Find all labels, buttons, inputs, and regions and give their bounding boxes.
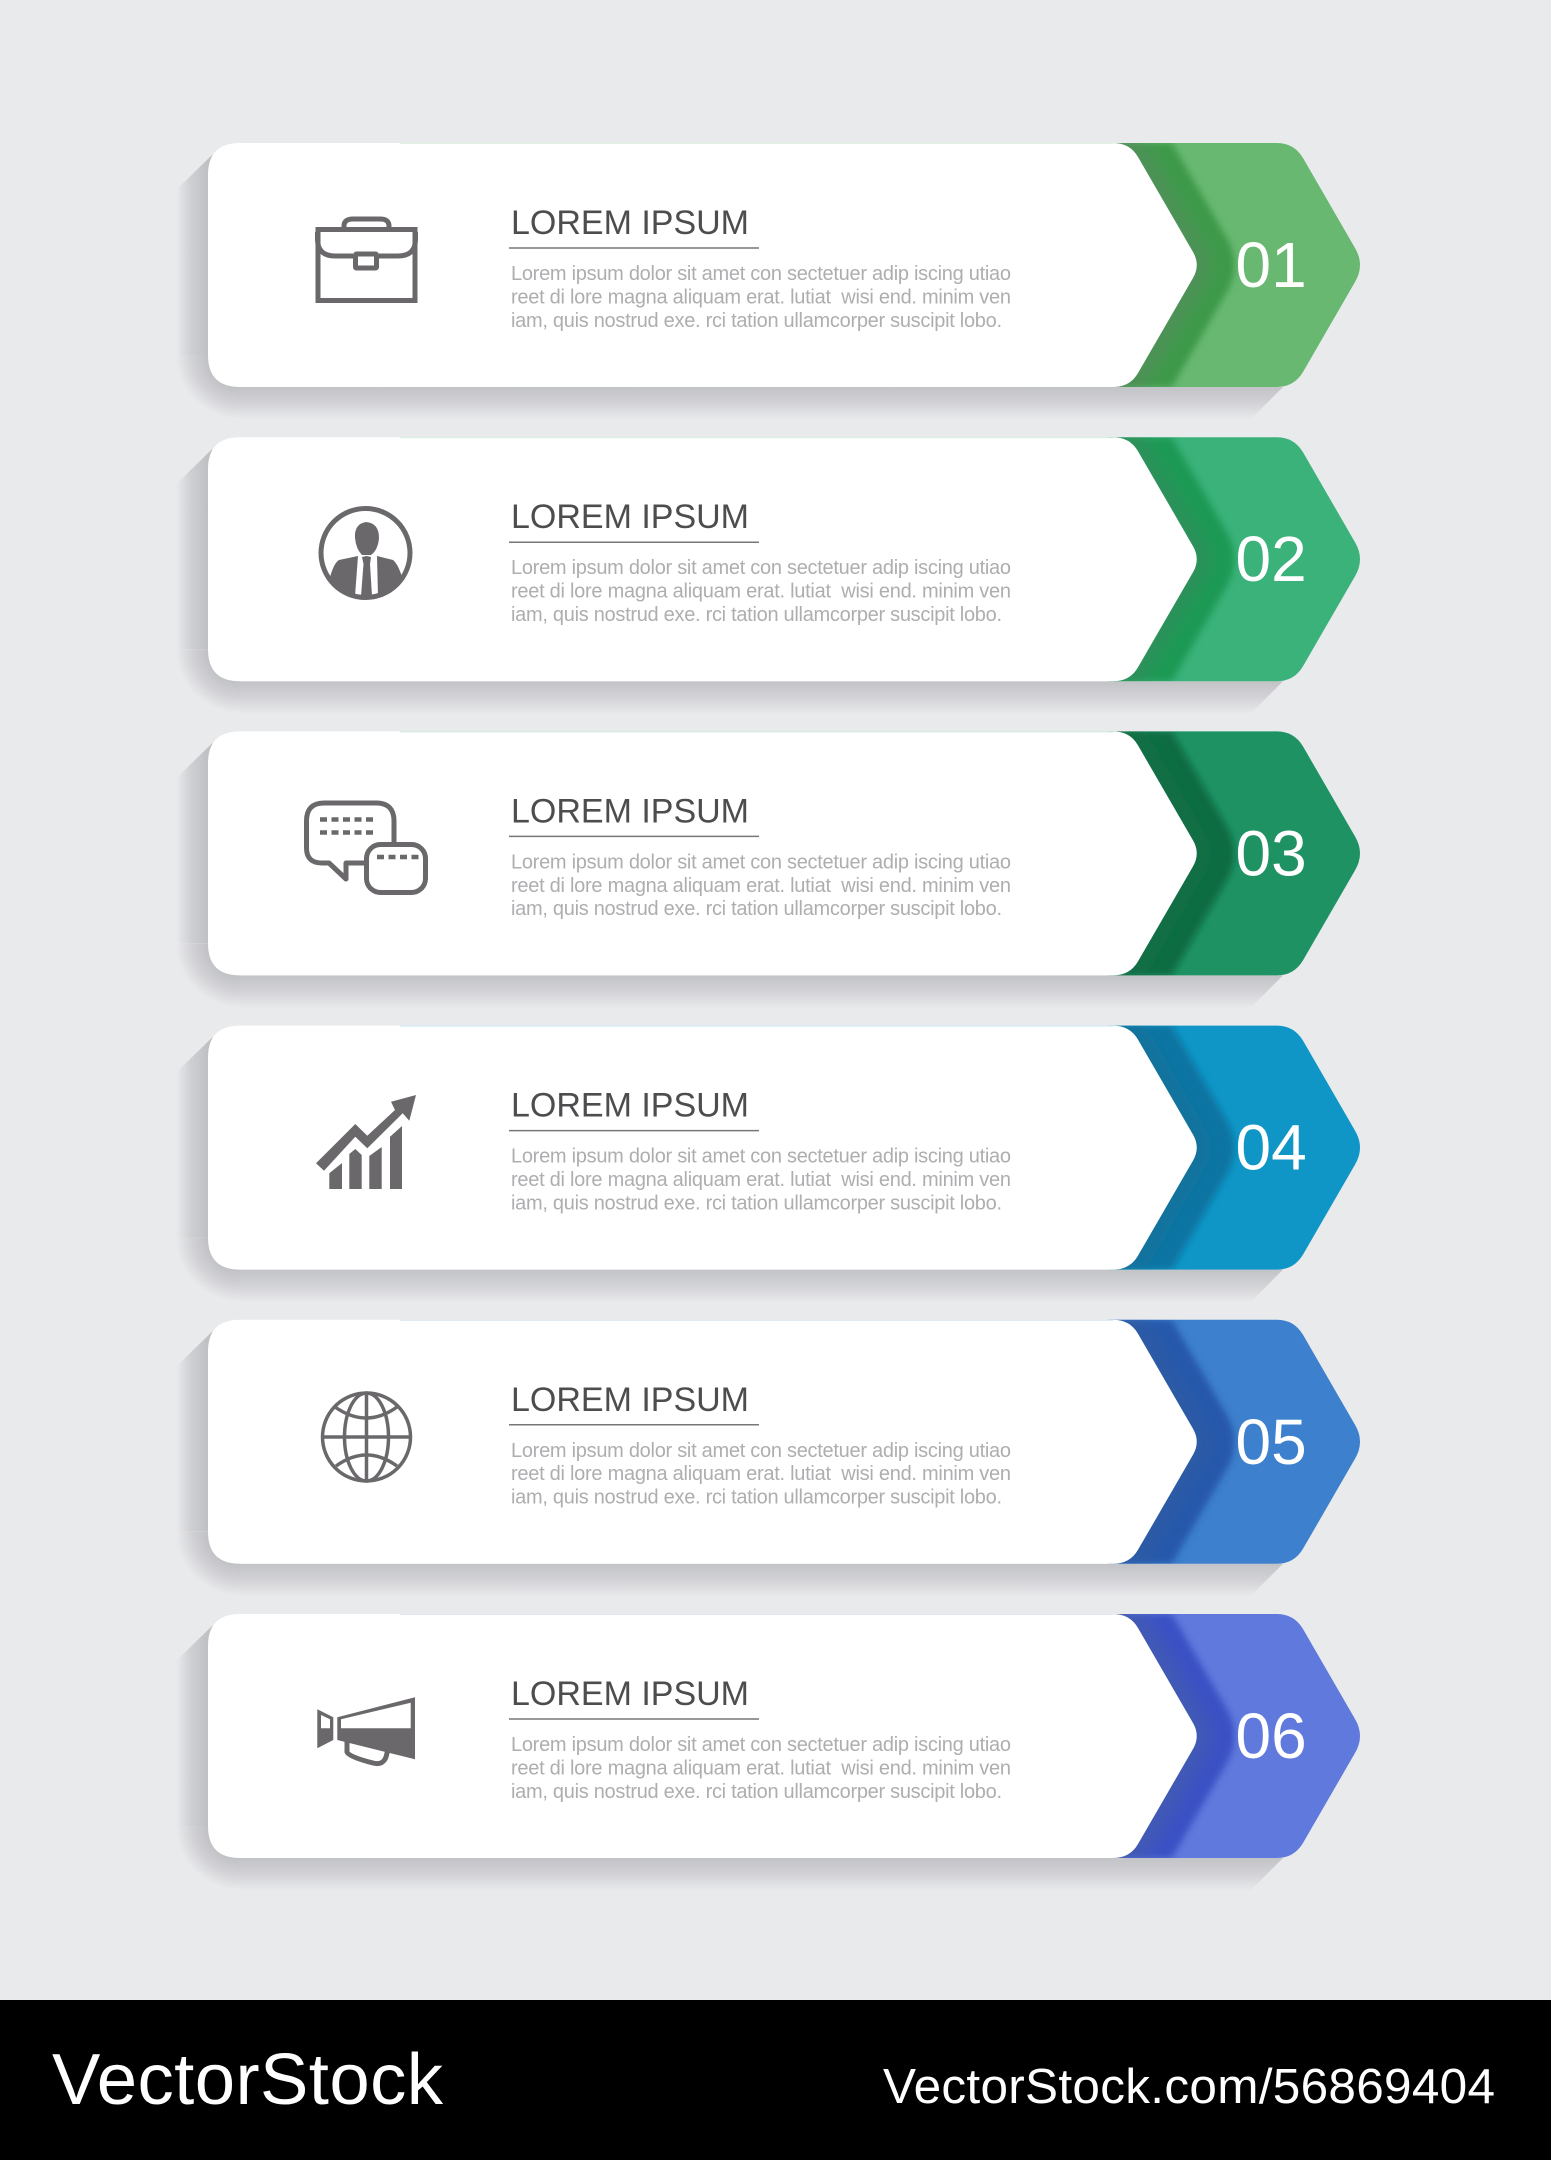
panel: step 03 — [176, 731, 1360, 1008]
footer url text: VectorStock.com/56869404 — [883, 2059, 1495, 2114]
text block: Lorem ipsum dolor sit amet con sectetuer adip iscing utiao — [511, 263, 1011, 285]
text block: Lorem ipsum dolor sit amet con sectetuer adip iscing utiao — [511, 1146, 1011, 1168]
text block: iam, quis nostrud exe. rci tation ullamcorper suscipit lobo. — [511, 1192, 1002, 1214]
text block: iam, quis nostrud exe. rci tation ullamcorper suscipit lobo. — [511, 604, 1002, 626]
text block: Lorem ipsum dolor sit amet con sectetuer adip iscing utiao — [511, 1440, 1011, 1462]
footer bar — [0, 2000, 1551, 2160]
text block: Lorem ipsum dolor sit amet con sectetuer adip iscing utiao — [511, 1734, 1011, 1756]
footer logo text: VectorStock — [52, 2039, 444, 2120]
text block: iam, quis nostrud exe. rci tation ullamcorper suscipit lobo. — [511, 310, 1002, 332]
number: 05 — [1236, 1406, 1307, 1478]
text block: Lorem ipsum dolor sit amet con sectetuer adip iscing utiao — [511, 557, 1011, 579]
text block — [511, 1734, 1011, 1803]
text block: reet di lore magna aliquam erat. lutiat wisi end. minim ven — [511, 1757, 1011, 1779]
text block: reet di lore magna aliquam erat. lutiat wisi end. minim ven — [511, 286, 1011, 308]
number: 03 — [1236, 817, 1307, 889]
icon: briefcase — [318, 219, 416, 300]
heading: LOREM IPSUM — [511, 792, 749, 830]
text block — [511, 1146, 1011, 1214]
panel: step 01 — [176, 143, 1360, 420]
heading: LOREM IPSUM — [511, 1381, 749, 1419]
heading: LOREM IPSUM — [511, 204, 749, 242]
panel: step 06 — [176, 1614, 1360, 1891]
number: 02 — [1236, 523, 1307, 595]
number: 01 — [1236, 229, 1307, 301]
panel: step 04 — [176, 1026, 1360, 1303]
text block — [511, 263, 1011, 332]
icon: megaphone — [317, 1697, 415, 1764]
heading: LOREM IPSUM — [511, 1087, 749, 1125]
text block: Lorem ipsum dolor sit amet con sectetuer adip iscing utiao — [511, 851, 1011, 873]
heading: LOREM IPSUM — [511, 1675, 749, 1713]
number: 04 — [1236, 1112, 1307, 1184]
text block — [511, 1440, 1011, 1509]
panel: step 05 — [176, 1320, 1360, 1597]
text block: reet di lore magna aliquam erat. lutiat wisi end. minim ven — [511, 875, 1011, 897]
text block: reet di lore magna aliquam erat. lutiat wisi end. minim ven — [511, 581, 1011, 603]
text block: reet di lore magna aliquam erat. lutiat wisi end. minim ven — [511, 1169, 1011, 1191]
number: 06 — [1236, 1700, 1307, 1772]
icon: businessman — [321, 508, 410, 598]
text block — [511, 851, 1011, 920]
icon: chat bubbles — [306, 803, 426, 892]
panel: step 02 — [176, 437, 1360, 714]
heading: LOREM IPSUM — [511, 498, 749, 536]
icon: globe — [322, 1393, 410, 1481]
text block: iam, quis nostrud exe. rci tation ullamcorper suscipit lobo. — [511, 898, 1002, 920]
text block — [511, 557, 1011, 626]
text block: reet di lore magna aliquam erat. lutiat wisi end. minim ven — [511, 1463, 1011, 1485]
icon: growth chart — [316, 1095, 416, 1189]
text block: iam, quis nostrud exe. rci tation ullamcorper suscipit lobo. — [511, 1781, 1002, 1803]
text block: iam, quis nostrud exe. rci tation ullamcorper suscipit lobo. — [511, 1487, 1002, 1509]
